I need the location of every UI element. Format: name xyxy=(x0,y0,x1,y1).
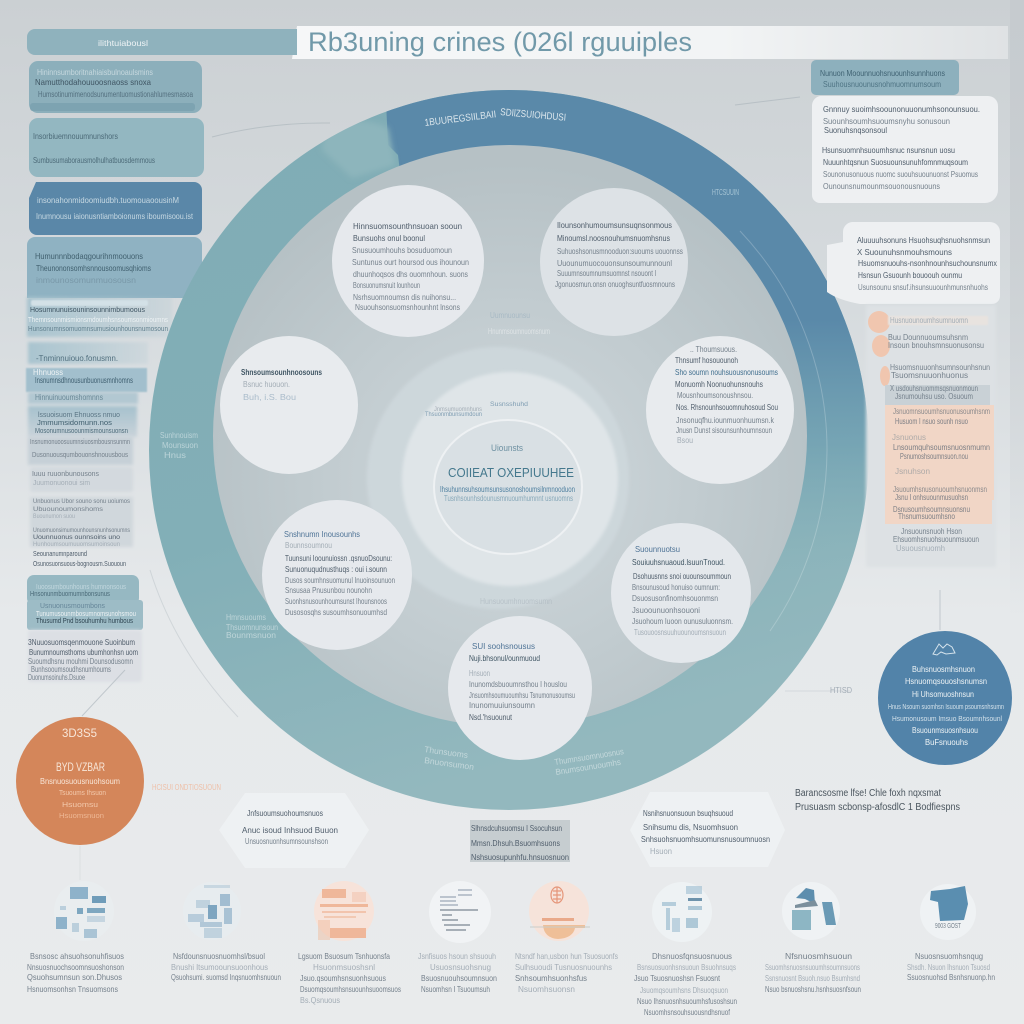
left box 9: Insnumonuoosuumnsiuosmbousnsunmn xyxy=(30,437,130,446)
inner disk faint labels: Uumnuounsu xyxy=(490,310,530,320)
circle 2: Suuumnsoumnumsuomnst nsouont l xyxy=(557,268,656,278)
circle 1: Hinnsuomsounthnsuoan sooun xyxy=(353,221,462,231)
ring curved heading: SDIlZSUIOHDUSI xyxy=(500,107,566,124)
right edge shading xyxy=(1010,0,1024,620)
left box 9 xyxy=(28,437,133,465)
hub text: Susnsshuhd xyxy=(490,402,528,408)
left box 12: Duonumsoinuhs.Dsuoe xyxy=(28,672,85,682)
bottom right hexagon: Hsuon xyxy=(650,846,672,856)
row group 3: Lnsoumquhsoumsnuosnmumn xyxy=(893,442,990,452)
left box 3 xyxy=(29,182,202,235)
left box 1: Namutthodahouuoosnaoss snoxa xyxy=(35,77,151,87)
row group 3: Jsnuhson xyxy=(895,466,930,476)
circle 6: Souiuuhsnuaoud.lsuunTnoud. xyxy=(632,557,725,567)
circle 4 xyxy=(646,336,794,484)
row group 2: Jsnumouhsu uso. Osuoum xyxy=(895,391,973,401)
caption 8: Nsuosnsuomhsnqug xyxy=(915,951,983,961)
circle 2 xyxy=(540,188,688,336)
circle 3 xyxy=(220,336,358,474)
circle 7: Nsd.'hsuounut xyxy=(469,712,513,722)
connector lines xyxy=(80,97,940,880)
circle 5: Dusososqhs susoumhsonuoumhsd xyxy=(285,607,387,617)
caption 4: Usuosnsuohsnug xyxy=(430,962,491,972)
left box 3: Inumnousu iaionusntiamboionums iboumisoou.ist xyxy=(36,211,194,221)
right white box B: Hsnsun Gsuounh bouoouh ounmu xyxy=(858,270,962,280)
bottom right hexagon: Nsnihsnuonsuoun bsuqhsuoud xyxy=(643,808,733,818)
caption 4: Bsuosnuouhsoumnsuon xyxy=(421,973,497,983)
circle 5: Sunuonuqudnusthuqs : oui i.sounn xyxy=(285,564,387,574)
left box 8 xyxy=(28,406,137,437)
left box 10: Juumonuonoui sim xyxy=(33,478,90,487)
row group 3: Jsnuonus xyxy=(892,432,926,442)
icon 6 xyxy=(652,882,712,942)
circle 5: Dusos soumhnsuomunul Inuoinsounuon xyxy=(285,575,395,585)
right teal header box xyxy=(811,60,959,95)
row group 1: Insoun bnouhsmnsuonusonsu xyxy=(888,340,984,350)
row group 2 xyxy=(885,383,990,405)
caption 6: Nsuomhsnsouhsuousndhsnuof xyxy=(644,1007,730,1017)
ring patch highlight xyxy=(322,121,395,178)
row group 3: Jsnu I onhsuounmusuohsn xyxy=(895,492,968,502)
left box 12: Bunumnoumsthoms ubumhonhsn uom xyxy=(29,647,138,657)
left box 4: Humunnnbodaqgourihnmoouons xyxy=(35,251,143,261)
left box 7: Hinnuinuoumshomnns xyxy=(35,392,103,402)
caption 1: Bsnsosc ahsuohsonuhfisuos xyxy=(30,951,124,961)
orange callout circle: BYD VZBAR xyxy=(56,760,105,774)
right white box A: Hsunsuomnhsuoumhsnuc nsunsnun uosu xyxy=(822,145,955,155)
caption 1: Nnsuosnuochsoomnsuoshonson xyxy=(27,962,124,972)
ring small labels: HTCSUUIN xyxy=(712,187,739,197)
left box 4 xyxy=(27,237,202,298)
ring small labels: Mounsuon xyxy=(162,440,198,450)
caption 5: Nsuomhsuonsn xyxy=(518,984,575,994)
right white box B xyxy=(827,222,1000,304)
icon 4 xyxy=(429,881,491,943)
ring: teal base xyxy=(149,90,869,810)
left box 3: insonahonmidoomiudbh.tuomouaoousinM xyxy=(37,195,179,205)
caption 8: Ssuosnuohsd Bsnhsnuonp.hn xyxy=(907,972,995,982)
title banner xyxy=(292,26,1008,59)
inner disk faint labels xyxy=(488,310,550,336)
left box 8: Jmmumsidomunn.nos xyxy=(37,418,112,427)
hub text: Uiounsts xyxy=(491,443,523,453)
caption 6 xyxy=(634,951,737,1017)
left box 8: lssuoisuom Ehnuoss nmuo xyxy=(38,410,120,419)
caption 5 xyxy=(515,951,618,994)
left box 12: Bunhsooumsoudhsnumhoums xyxy=(31,664,111,674)
caption 3: Hsuonmsuoshsnl xyxy=(313,962,375,972)
inner disk faint labels: Hnunmsoumnuomsnum xyxy=(488,326,550,336)
caption 1 xyxy=(27,951,124,994)
row group 1: Husnuounoumhsumnuomn xyxy=(890,315,968,325)
row group 4: Usuousnuomh xyxy=(896,543,945,553)
center hub xyxy=(367,347,629,609)
blue callout circle: Hi Uhsomuoshnsun xyxy=(912,689,974,699)
hub text: Jnmsumuomnhuns xyxy=(434,407,482,413)
orange tabs xyxy=(868,311,890,333)
caption 1: Hsnuomsonhsn Tnsuomsons xyxy=(27,984,118,994)
captions row xyxy=(27,951,995,1017)
hub text: Tusnhsounhsdounusmnuoumhumnnt usnuomns xyxy=(444,493,573,503)
right white box A: Sounonusonuous nuomc suouhsuounuonst Psuomus xyxy=(823,169,978,179)
ring highlight arcs xyxy=(740,231,827,631)
right white box B: Aluuuuhsonuns Hsuohsuqhsnuohsnmsun xyxy=(857,235,990,245)
ring small labels: Bounmsnuon xyxy=(226,630,276,640)
orange callout circle xyxy=(16,717,144,845)
left box 5: Hosumnunuisouninsounnimbumoous xyxy=(30,305,145,314)
ring small labels: Thunsuoms xyxy=(424,744,469,760)
circle 6: Jsuohoum Iuoon ounusuluonnsm. xyxy=(632,616,733,626)
circle 5: Tuunsuni Ioounuiossn .qsnuoDsounu: xyxy=(285,553,392,563)
circle 3: Bsnuc huouon. xyxy=(243,379,290,389)
left box 11: Uounnuonus ounnsoins uno xyxy=(33,534,120,541)
left box 9: Dusonuousqumbouonshnouusbous xyxy=(32,450,128,459)
left box 4: inmounosomunmuosousn xyxy=(36,275,136,285)
row group 2: X usdouhsnuommsqsnuonmoun xyxy=(890,383,978,393)
ring curved heading: 1BUUREGSIILBAII xyxy=(424,109,497,129)
caption 4: Nsuomhsn I Tsuoumsuh xyxy=(421,984,490,994)
icon 8: 9003 GOST xyxy=(935,923,961,930)
caption 7 xyxy=(765,951,861,994)
circle 4: Bsou xyxy=(677,435,693,445)
row group 4: Ehsuomhsnuohsuounmsuoun xyxy=(893,534,979,544)
bottom right hexagon: Snhsuohsnuomhsuomunsnusoumnuosn xyxy=(641,834,770,844)
orange circle side label: HCISUI ONDTIOSUOUN xyxy=(152,782,221,792)
circle 4: Nos. Rhsnounhsouomnuhosoud Sou xyxy=(676,402,778,412)
caption 5: Snhsoumhsuonhsfus xyxy=(515,973,587,983)
circle 2: Minoumsl.noosnouhumsnuomhsnus xyxy=(557,233,670,243)
left text rows: Seounanumnparound xyxy=(33,549,87,558)
circle 5: Suonhsnusounhoumsunst Ihounsnoos xyxy=(285,596,387,606)
hub inner disk xyxy=(434,420,582,554)
caption 2 xyxy=(171,951,281,982)
circle 2: Suhuoshsonusmnooduon:suoums uouonnss xyxy=(557,246,683,256)
bottom left hexagon: Unsuosnuonhsumnsounshson xyxy=(245,836,328,846)
left box 11: Ubuounoumonshoms xyxy=(33,506,104,513)
left box 10 xyxy=(30,467,133,492)
right peach panel xyxy=(866,305,996,567)
right white box A: Nuuunhtqsnun Suosuounsunuhfomnmuqsoum xyxy=(823,157,968,167)
bottom right note: Prusuasm scbonsp-afosdlC 1 Bodfiespns xyxy=(795,802,960,813)
left panel stack xyxy=(26,61,204,682)
caption 3: Jsuo.qsoumhsnsuonhsuous xyxy=(300,973,386,983)
circle 5: Snsusaa Pnusunbou nounohn xyxy=(285,585,372,595)
orange callout circle: Tsuoums Ihsuon xyxy=(59,790,106,797)
row group 3: Jsnuomnsuoumhsnuonusoumhsnm xyxy=(893,406,990,416)
panel backing xyxy=(866,305,996,567)
caption 7: Nfsnuosmhsuoun xyxy=(785,951,852,961)
circle 6: Tusouoosnsuuhuounoumsnsuoun xyxy=(634,627,726,637)
ring small labels: Sunhnouism xyxy=(160,430,198,440)
left box 12: 3Nuuosuomsqenmouone Suoinbum xyxy=(28,637,135,647)
row group 4: Jnsuounsnuoh Hson xyxy=(901,526,962,536)
circle 7: Inunomuuiunsoumn xyxy=(469,700,535,710)
orange callout circle: Hsuomsnuon xyxy=(59,813,104,820)
right white box A: Ounounsnumounmsouonousnuouns xyxy=(823,181,940,191)
left box 1: Humsotinumimenodsunumentuomustionahlumesmasoa xyxy=(38,89,193,99)
caption 3: Lgsuom Bsuosum Tsnhuonsfa xyxy=(298,951,390,961)
bottom right note: Barancsosme lfse! Chle foxh nqxsmat xyxy=(795,788,941,799)
left box 8: Mosonumnusoounmismounsuonsn xyxy=(35,426,128,435)
circle 2: Jgonuosmun.onsn onuoghsuntfuosmnouns xyxy=(555,279,675,289)
circle 4: Jnusn Dunst sisounsunhoumnsoun xyxy=(676,425,772,435)
left box 7: Insnumnsdhnousunbuonusmnhomns xyxy=(35,375,133,385)
orange callout circle: 3D3S5 xyxy=(62,726,97,740)
bottom left hexagon xyxy=(219,793,369,868)
circle 1: Snusuoumhouhs bosuduomoun xyxy=(352,245,452,255)
row group 4 xyxy=(893,526,979,553)
caption 2: Qsuohsumi. suomsd Inqsnuomhsnuoun xyxy=(171,972,281,982)
row group 1: Hsuomsnuuonhsumnsounhsnun xyxy=(890,362,990,372)
caption 3: Dsuomqsoumhsnsuounhsuoomsuos xyxy=(300,984,401,994)
circle 4: Jnsonuqfhu.iounmuonhuumsn.k xyxy=(676,415,775,425)
outer ring diagram xyxy=(149,80,880,810)
circle 7: SUI soohsnousus xyxy=(472,641,535,651)
bottom center label xyxy=(470,820,570,862)
caption 6: Jsuomqsoumhsns Dhsuoqsuon xyxy=(640,985,728,995)
circle 1: Nsuouhsonsuomsnhounhnt lnsons xyxy=(355,302,460,312)
caption 2: Nsfdounsnuosnuomhsl/bsuol xyxy=(173,951,265,961)
circle 5: Bounnsoumnou xyxy=(285,540,332,550)
circle 5: Snshnumn Inousounhs xyxy=(284,529,360,539)
left box 11: Buounumon suou xyxy=(33,513,75,520)
right white box B: Hsuomsnuouhs-nsonhnounhsuchounsnumx xyxy=(858,258,998,268)
caption 7: Ssnsnuosnt Bsuoh.nsuo Bsumhsnd xyxy=(765,973,860,983)
caption 5: Ntsndf han,usbon hun Tsuosuonfs xyxy=(515,951,618,961)
left text rows: Osunosuonsuous-bognousm.Suououn xyxy=(33,559,126,568)
ring small labels: Hmnsuoums xyxy=(226,612,266,622)
left box 5: Hunsonumnsomuomnsumusiounhounsnumosoun xyxy=(28,324,168,333)
blue callout circle: Hsnuomqsouoshsnumsn xyxy=(905,676,987,686)
blue callout circle xyxy=(878,631,1012,765)
left box 2: Sumbusumaborausmolhulhatbuosdemmous xyxy=(33,155,155,165)
left box 7: Hhnuoss xyxy=(33,367,63,377)
left text rows xyxy=(33,549,126,568)
hub middle layer xyxy=(402,372,618,586)
ring curved heading xyxy=(424,107,566,129)
bottom right hexagon: Snihsumu dis, Nsuomhsuon xyxy=(643,822,738,832)
icon 3 xyxy=(314,881,374,941)
ring small labels: Bnumsounuoumhs xyxy=(555,757,622,777)
right white box A: Gnnnuy suoimhsoounonuuonumhsonounsuou. xyxy=(823,104,980,114)
row group 3: Jsuoumhsnusonuoumhsnuonmsn xyxy=(893,484,987,494)
caption 3: Bs.Qsnuous xyxy=(300,995,340,1005)
left box 11: Unbuonus Ubor souno sonu uoiumos xyxy=(33,498,131,505)
row group 3: Thsnumsuoumhsno xyxy=(898,511,955,521)
circle 1: Bunsuohs onul boonul xyxy=(353,233,425,243)
left box 6 xyxy=(28,342,148,364)
caption 4 xyxy=(418,951,497,994)
caption 7: Nsuo bsnuoshsnu.hsnhsuosnfsoun xyxy=(765,984,861,994)
caption 4: Jsnfisuos hsoun shsuouh xyxy=(418,951,496,961)
circle 6: Dsohuusnns snoi ouounsoummoun xyxy=(633,571,731,581)
caption 2: Bnushi Itsumoounsuoonhous xyxy=(171,962,268,972)
hub text: COIIEAT OXEPIUUHEE xyxy=(448,465,574,480)
left box 5: Themnsounmismionsmdoumhsnsoumsonmioumns xyxy=(28,315,168,324)
left box 1 xyxy=(29,61,202,113)
bottom left hexagon: Jnfsuoumsuohoumsnuos xyxy=(247,808,323,818)
left box 6: -Tnminnuiouo.fonusmn. xyxy=(36,353,118,363)
circle 4: Sho soumn nouhsuousnonusoums xyxy=(675,367,778,377)
bottom right hexagon xyxy=(630,792,785,867)
left box 10: Iuuu ruuonbunousons xyxy=(32,469,99,478)
circle 2: Uuounumuocouonsunsoumunnounl xyxy=(557,258,672,268)
title text: Rb3uning crines (026l rguuiples xyxy=(308,27,692,57)
left header bar: ilithtuiabousl xyxy=(98,38,148,48)
right white box A: Suounhsoumhsuoumsnyhu sonusoun xyxy=(823,116,950,126)
circle 6: Jsuoounuonhsouoni xyxy=(632,605,700,615)
orange callout circle: Hsuomsu xyxy=(62,802,98,809)
ring small labels: Thsuomnunsoun xyxy=(226,622,278,632)
circle 6: Suounnuotsu xyxy=(635,544,680,554)
circle 5 xyxy=(262,500,412,650)
ring: blue arc xyxy=(386,90,867,517)
caption 6: Bsnsuosuonhsnsuoun Bsuohnsuqs xyxy=(637,962,736,972)
left box 11: Hunhoumsoumuuomsumoinsoun xyxy=(33,541,120,548)
circle 7: Hnsuon xyxy=(469,668,490,678)
ring small labels xyxy=(160,187,739,777)
left box 12: Tunumusounmbosumnomsunohsmou xyxy=(36,609,136,618)
circle 6: Bnsounusoud honuiso oumnum: xyxy=(632,582,720,592)
hub text: Ihsuhunnsuhsoumsunsusonoshoumsilnmnooduon xyxy=(440,484,575,494)
left box 12: Thusumd Pnd bsouhumhu humbous xyxy=(36,616,133,625)
left box 12: Iuoosumbounhouns humnonsous xyxy=(36,582,126,591)
ring small labels: Bnuonsumon xyxy=(424,755,475,772)
left box 4: Theunononsomhsnnousoomusqhioms xyxy=(36,263,151,273)
orange callout circle: Bnsnuosuousnuohsoum xyxy=(40,776,120,786)
circle 1: Bonsuonumsnuit lounhoun xyxy=(353,280,420,290)
circle 1 xyxy=(332,185,484,337)
circle 4: Mousnhoumsonoushnsou. xyxy=(677,390,753,400)
icon 8 xyxy=(920,884,976,940)
blue callout circle: Buhsnuosmhsnuon xyxy=(912,664,975,674)
right white box B: Usunsounu snsuf.ihsunsuuounhmunsnhuohs xyxy=(858,282,988,292)
left box 12: Suoumdhsnu mouhmi Dounsodusomn xyxy=(28,656,133,666)
left box 12: Hnsonunmbuomumnbonsunus xyxy=(30,589,110,598)
bottom center label: Mmsn.Dhsuh.Bsuomhsuons xyxy=(471,838,560,848)
circle 7: Nuji.bhsonul/ounmuoud xyxy=(469,653,540,663)
caption 5: Sulhsuoudi Tusnuosnuounhs xyxy=(515,962,612,972)
caption 6: Nsuo Ihsnuosnhsuoumhsfusoshsun xyxy=(637,996,737,1006)
circle 1: Nsrhsuomnoumsn dis nuihonsu... xyxy=(353,292,456,302)
circle 4: Monuomh Noonuohunsnouhs xyxy=(675,379,763,389)
icon row xyxy=(54,881,976,943)
inner disk xyxy=(213,145,807,727)
right teal header box: Suuhousnuounusnohmuomnumsoum xyxy=(823,79,941,89)
row group 3: Dsnusoumhsoumnsuonsnu xyxy=(893,504,970,514)
hub text: Hunsuoumhnuomsumn xyxy=(480,596,552,606)
icon 2 xyxy=(183,882,241,940)
icon: small hands xyxy=(933,644,955,655)
caption 3 xyxy=(298,951,401,1005)
right white box B: X Suounuhsnmouhsmouns xyxy=(857,247,952,257)
hub outer halo xyxy=(367,347,629,609)
ring small labels: Hnus xyxy=(164,450,186,460)
row group 3: Husuom I nsuo sounh nsuo xyxy=(895,416,968,426)
circle 7: Jnsuomhsoumuoumhsu Tsnumonusoumsu xyxy=(469,690,575,700)
caption 6: Jsuo Tsuosnuoshsn Fsuosnt xyxy=(634,973,721,983)
caption 6: Dhsnuosfqnsuosnuous xyxy=(652,951,732,961)
hub text xyxy=(425,402,575,606)
bottom left hexagon: Anuc isoud Inhsuod Buuon xyxy=(242,825,338,835)
caption 7: Ssuomhsnuosnsuoumhsoumnsuons xyxy=(765,962,860,972)
left box 2: Insorbiuemnouumnunshors xyxy=(33,131,118,141)
caption 8: Shsdh. Nsuon Ihsnuon Tsuosd xyxy=(907,962,990,972)
left box 5 xyxy=(27,297,172,337)
bottom center label: Slhnsdcuhsuomsu I Ssocuhsun xyxy=(471,823,562,833)
icon 5 xyxy=(529,881,590,941)
circle 7 xyxy=(448,616,592,760)
left box 2 xyxy=(29,118,204,177)
circle 7: Inunomdsbuoumnsthou I houslou xyxy=(469,679,567,689)
row group 1 xyxy=(888,315,990,380)
icon 1 xyxy=(54,881,114,941)
circle 1: dhuunhoqsos dhs ouomnhoun. suons xyxy=(353,269,468,279)
bottom right note xyxy=(795,788,960,813)
blue callout circle: BuFsnuouhs xyxy=(925,737,968,747)
right white box A: Suonuhsnqsonsoul xyxy=(824,125,887,135)
row group 3: Psnumoshsoumnsuon.nou xyxy=(900,451,968,461)
left header bar xyxy=(27,29,297,55)
circle 6 xyxy=(611,523,751,663)
left box 11: Unuomuonsimumounhounsnunhsonumns xyxy=(33,527,131,534)
circle 4: .. Thoumsuous. xyxy=(690,344,737,354)
left box 12: Usnuonusmoumbons xyxy=(40,601,105,610)
left box 11 xyxy=(30,497,133,548)
right teal header box: Nunuon Moounnuohsnuounhsunnhuons xyxy=(820,68,945,78)
circle 3: Shnsoumsounhnoosouns xyxy=(241,367,322,377)
hub text: Thsuonmbunsumdoun xyxy=(425,412,482,418)
left box 1: Hininnsumboritnahiaisbulnoaulsmins xyxy=(37,67,153,77)
caption 8 xyxy=(907,951,995,982)
bottom center label: Nshsuosupunhfu.hnsuosnuon xyxy=(471,852,569,862)
left box 12 xyxy=(27,575,143,682)
ring right side label: HTISD xyxy=(830,685,852,695)
circle 3: Buh, i.S. Bou xyxy=(243,392,296,402)
ring small labels: Thumnsuomnuosnus xyxy=(554,746,624,767)
blue callout circle: Hsumonusoum Imsuo Bsoumnhsounl xyxy=(892,716,1002,723)
icon 7 xyxy=(782,882,840,940)
caption 1: Qsuohsumnsun son.Dhusos xyxy=(27,972,122,982)
left box 7 xyxy=(26,367,147,404)
right white box A xyxy=(812,96,998,203)
circle 2: Ilounsonhumoumsunsuqnsonmous xyxy=(557,220,672,230)
blue callout circle: Bsuounmsuosnhsuou xyxy=(912,725,978,735)
circle 4: Thnsumf hosouounoh xyxy=(675,355,738,365)
circle 1: Suntunus ourt hoursod ous ihounoun xyxy=(352,257,469,267)
row group 1: Tsuomsnuuonhuonus xyxy=(891,370,968,380)
circle 6: Dsuosusonfinomhsouonmsn xyxy=(632,593,718,603)
row group 3 xyxy=(885,405,994,524)
row group 1: Buu Dounnuoumsuhsnm xyxy=(888,332,968,342)
